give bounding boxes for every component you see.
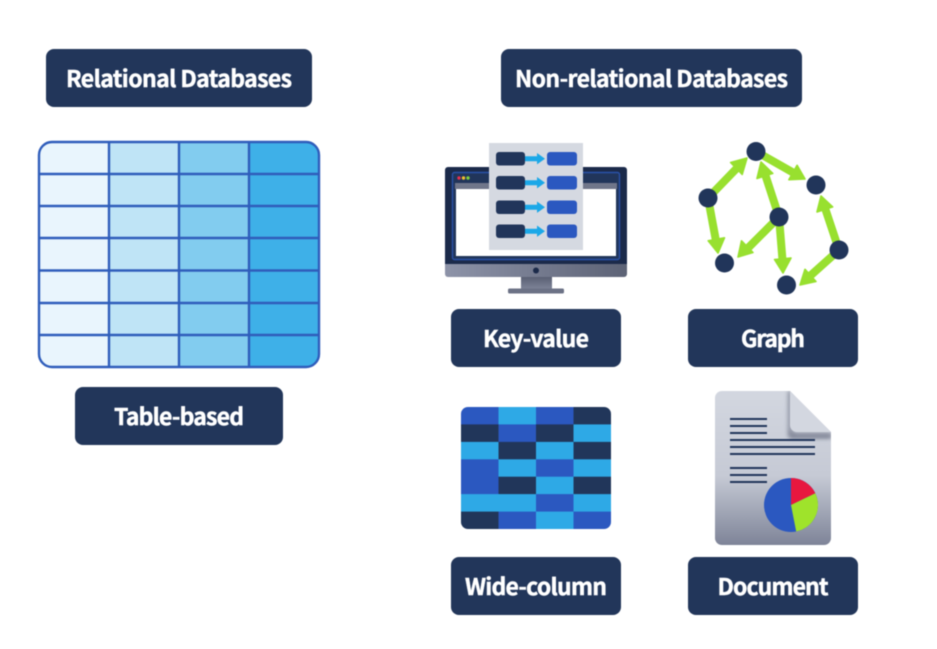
- graph arrows: [708, 152, 839, 285]
- key-value sheet: [489, 143, 583, 250]
- label: Key-value: [451, 309, 621, 367]
- label: Graph: [688, 309, 858, 367]
- monitor: [445, 167, 627, 294]
- icon: relational table: [39, 142, 319, 367]
- icon: key-value monitor: [445, 143, 627, 294]
- heading: Non-relational Databases: Non-relational Databases: [515, 60, 788, 94]
- heading: Relational Databases: Relational Databases: [66, 60, 292, 94]
- label: Wide-column: Wide-column: [465, 568, 607, 602]
- heading: Relational Databases: [46, 49, 312, 107]
- label: Key-value: Key-value: [483, 320, 589, 354]
- label: Document: Document: [718, 568, 829, 602]
- label: Table-based: Table-based: [114, 398, 244, 432]
- graph nodes: [698, 142, 848, 294]
- pie chart: [764, 478, 818, 532]
- icon: document: [715, 391, 831, 545]
- document fold: [788, 391, 831, 438]
- document text lines: [730, 419, 815, 482]
- label: Table-based: [75, 387, 283, 445]
- label: Wide-column: [451, 557, 621, 615]
- label: Document: [688, 557, 858, 615]
- heading: Non-relational Databases: [501, 49, 802, 107]
- icon: graph network: [698, 142, 848, 294]
- label: Graph: Graph: [741, 320, 805, 354]
- icon: wide-column grid: [461, 407, 611, 529]
